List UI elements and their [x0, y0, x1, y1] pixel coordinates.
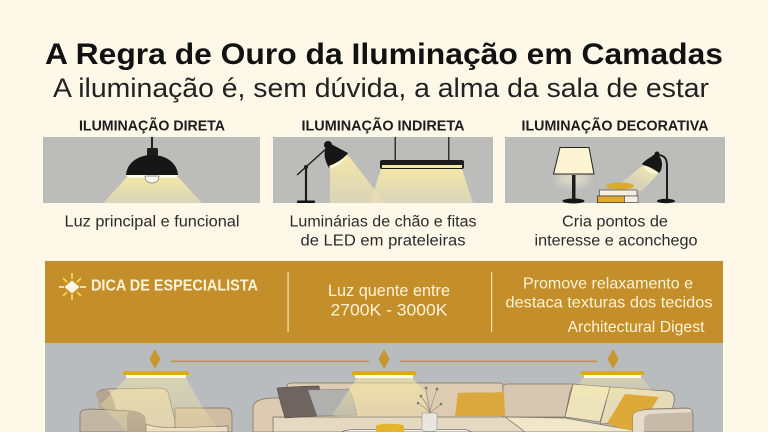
heading: decorative lighting: ILUMINAÇÃO DECORATIVA — [522, 116, 709, 134]
caption: direct lighting: Luz principal e funcional — [64, 214, 240, 230]
wall background — [273, 137, 493, 203]
desk lamp beam — [612, 166, 658, 191]
text: colour temperature: Luz quente entre — [328, 282, 450, 300]
banner: specialist tip: 2700K - 3000K — [330, 302, 448, 320]
text: benefit: Promove relaxamento e — [523, 276, 693, 292]
cushion: dark — [277, 386, 320, 418]
caption: decorative lighting: Cria pontos de — [562, 214, 668, 230]
panel: decorative lighting — [505, 116, 725, 250]
panel: direct lighting — [43, 116, 260, 230]
sofa right arm — [633, 408, 693, 432]
title: A Regra de Ouro da Iluminação em Camadas — [45, 38, 723, 71]
coffee table — [342, 424, 471, 432]
armchair — [80, 388, 232, 432]
wall — [45, 343, 723, 432]
panel: indirect lighting — [273, 116, 493, 250]
text: source: Architectural Digest — [568, 319, 705, 336]
icon: linear shelf light — [380, 137, 464, 169]
sofa light centre — [332, 378, 428, 417]
icon: books — [598, 182, 638, 202]
wall background — [505, 137, 725, 203]
icon: pendant lamp — [126, 137, 178, 183]
subtitle: A iluminação é, sem dúvida, a alma da sala de estar — [53, 73, 709, 103]
wall background — [43, 137, 260, 203]
sofa back — [287, 383, 503, 418]
sofa left arm — [253, 398, 287, 432]
divider — [491, 272, 492, 332]
armchair light — [100, 378, 220, 432]
light bars — [123, 371, 644, 378]
sofa — [253, 383, 674, 432]
icon: table lamp — [554, 148, 594, 204]
icon: floor lamp — [297, 141, 348, 203]
heading: specialist tip: DICA DE ESPECIALISTA — [91, 278, 258, 294]
icon: desk lamp — [642, 152, 675, 203]
caption: indirect lighting: Luminárias de chão e fitas — [290, 214, 477, 230]
heading: direct lighting: ILUMINAÇÃO DIRETA — [79, 116, 225, 134]
panel: indirect lighting: de LED em prateleiras — [300, 232, 466, 250]
heading: indirect lighting: ILUMINAÇÃO INDIRETA — [302, 116, 465, 134]
cushion: grey — [308, 389, 357, 416]
banner background — [45, 261, 723, 344]
shelf light beam — [370, 169, 473, 203]
vase with flowers — [417, 387, 442, 432]
divider — [288, 272, 289, 332]
illustration: living room — [45, 343, 723, 432]
cushion: mustard left — [455, 392, 505, 416]
light beam — [103, 177, 202, 203]
diamonds — [150, 349, 618, 369]
connector lines — [171, 360, 597, 362]
sofa seat — [273, 417, 525, 432]
sofa light right — [570, 378, 658, 404]
banner: specialist tip — [45, 261, 723, 344]
banner: specialist tip: destaca texturas dos tecidos — [506, 294, 712, 312]
panel: decorative lighting: interesse e aconchego — [534, 232, 698, 250]
floor lamp beam — [330, 155, 385, 203]
icon: sun with diamond — [59, 273, 86, 300]
cushion: mustard right — [607, 394, 659, 430]
